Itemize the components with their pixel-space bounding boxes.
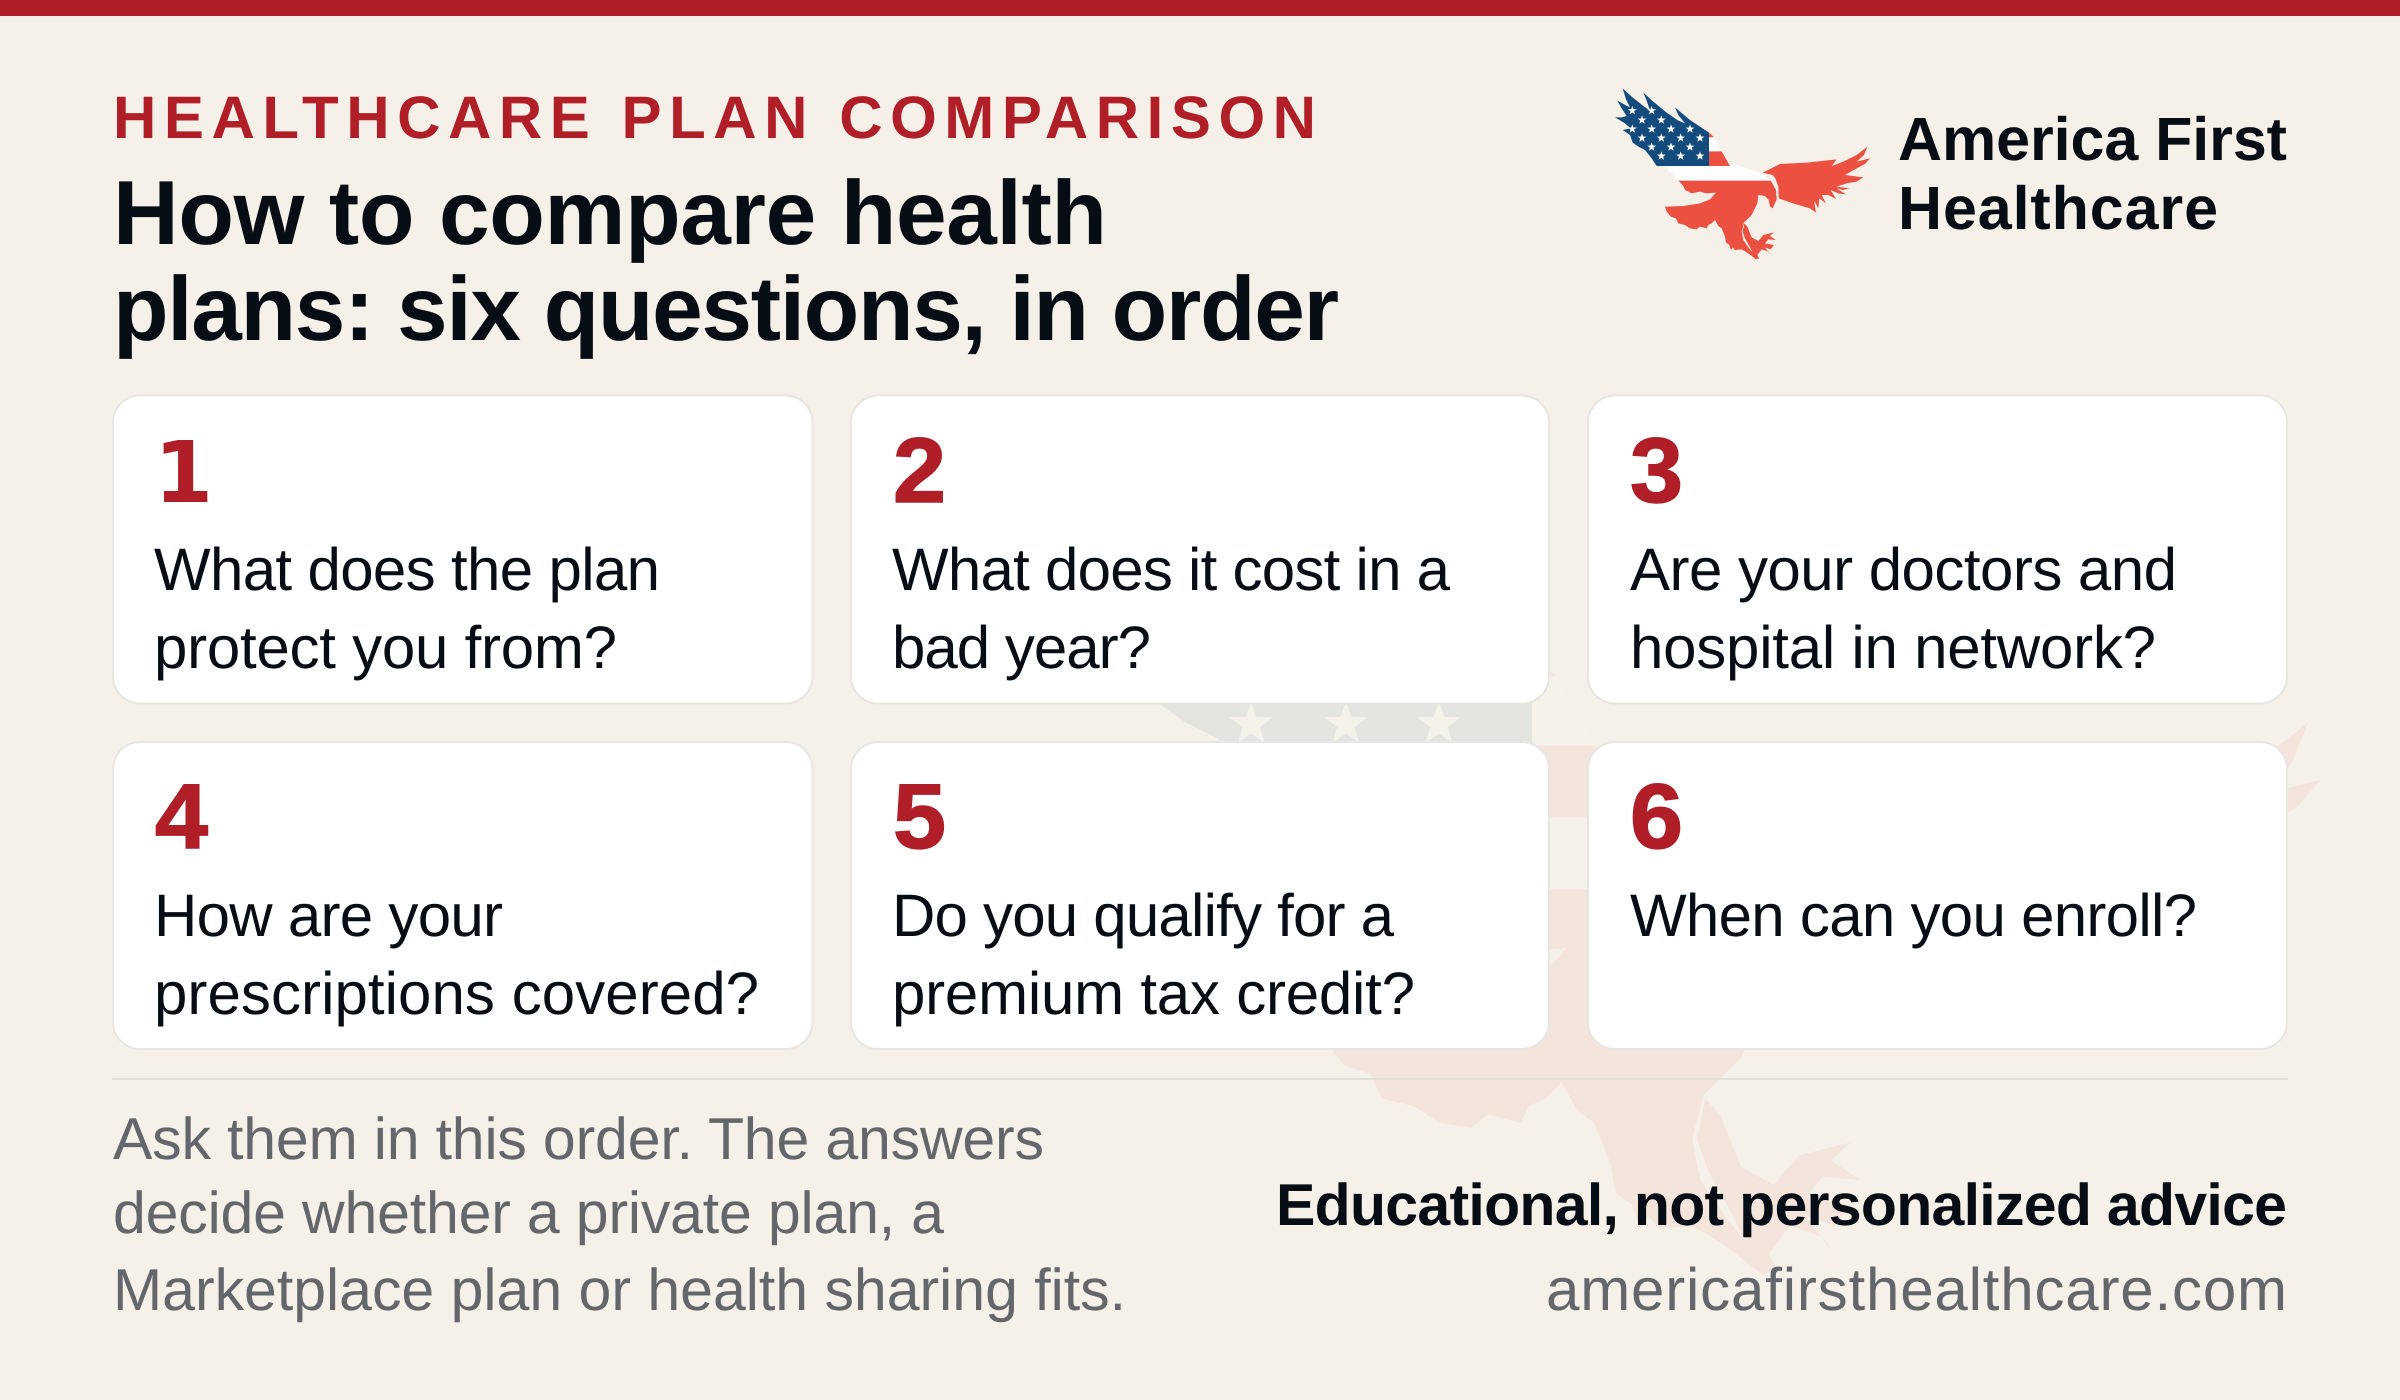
footer note: decide whether a private plan, a: [113, 1180, 944, 1246]
number 5: 5: [893, 766, 946, 868]
top accent bar: [0, 0, 2400, 16]
question 2 text: What does it cost in a: [892, 536, 1451, 603]
question 2 text: bad year?: [892, 614, 1151, 681]
question 6 text: When can you enroll?: [1630, 882, 2197, 949]
question 5 text: [892, 882, 1415, 1027]
icon: eagle logo: [1615, 88, 1870, 259]
panel: question 6: [1588, 742, 2287, 1049]
title: plans: six questions, in order: [113, 259, 1339, 360]
panel: question 3: [1588, 396, 2287, 704]
panel: question 2: [851, 396, 1549, 704]
eyebrow heading: HEALTHCARE PLAN COMPARISON: [113, 84, 1316, 151]
number 2: 2: [893, 420, 946, 522]
number 1: 1: [154, 424, 213, 523]
question 5 text: Do you qualify for a: [892, 882, 1395, 949]
question 4 text: prescriptions covered?: [154, 960, 759, 1027]
title: How to compare health: [113, 163, 1107, 264]
title: [113, 163, 1339, 360]
brand name: [1898, 105, 2287, 242]
footer note: Ask them in this order. The answers: [113, 1106, 1044, 1172]
footer note: Marketplace plan or health sharing fits.: [113, 1257, 1126, 1323]
question 3 text: Are your doctors and: [1630, 536, 2177, 603]
number 4: 4: [155, 766, 208, 868]
disclaimer: Educational, not personalized advice: [1276, 1172, 2287, 1238]
question 4 text: [154, 882, 759, 1027]
website url: americafirsthealthcare.com: [1546, 1256, 2287, 1323]
question 1 text: [154, 536, 660, 681]
question 2 text: [892, 536, 1451, 681]
panel: question 1: [113, 396, 812, 704]
question 1 text: protect you from?: [154, 614, 617, 681]
question 5 text: premium tax credit?: [892, 960, 1415, 1027]
question 3 text: hospital in network?: [1630, 614, 2156, 681]
brand name: Healthcare: [1898, 174, 2218, 242]
question 4 text: How are your: [154, 882, 503, 949]
question 3 text: [1630, 536, 2177, 681]
number 3: 3: [1630, 420, 1683, 522]
number 6: 6: [1630, 766, 1683, 868]
panel: question 4: [113, 742, 812, 1049]
footer note: [113, 1106, 1126, 1323]
question 1 text: What does the plan: [154, 536, 660, 603]
watermark: eagle: [1072, 437, 2321, 1275]
panel: question 5: [851, 742, 1549, 1049]
brand name: America First: [1898, 105, 2287, 173]
